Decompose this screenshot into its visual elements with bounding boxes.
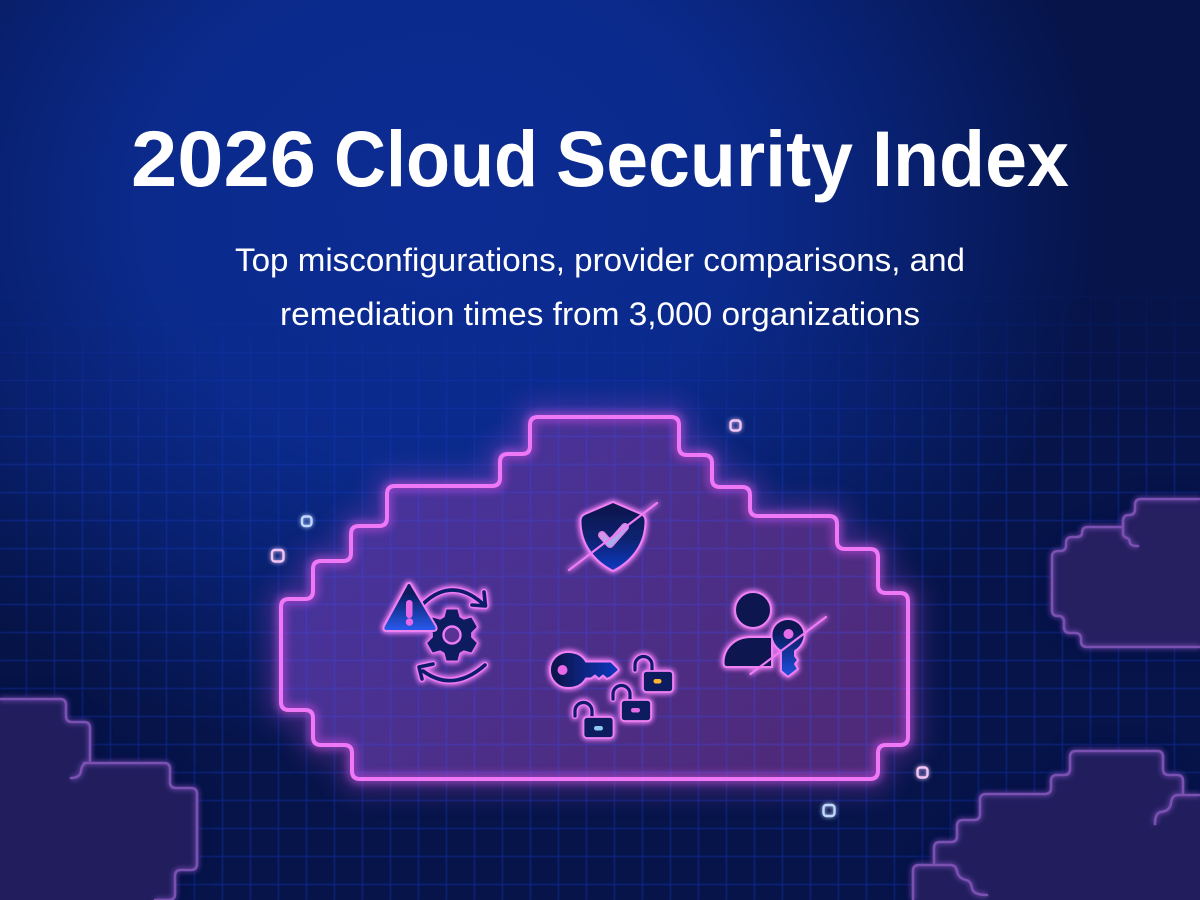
icon: warning triangle xyxy=(383,583,437,631)
icon: warning triangle, gear and rotation arrows xyxy=(383,583,486,681)
decorative pixel: blue left xyxy=(302,516,312,526)
title: 2026 xyxy=(131,114,316,203)
icon: padlock 2 xyxy=(613,686,651,721)
title xyxy=(131,114,1069,203)
main cloud xyxy=(270,410,920,790)
icon: key xyxy=(550,652,619,688)
icon: top rotation arrow xyxy=(424,590,486,606)
background cloud: bottom right xyxy=(913,751,1200,900)
subtitle: remediation times from 3,000 organizations xyxy=(280,296,920,332)
decorative pixel: pink top xyxy=(730,420,740,430)
title: Index xyxy=(872,114,1069,203)
subtitle xyxy=(235,242,965,332)
title: Cloud xyxy=(334,114,538,203)
icon: padlock 1 xyxy=(635,657,673,692)
icon: padlock 3 xyxy=(575,702,614,738)
title: Security xyxy=(556,114,853,203)
icon: user with key, struck through xyxy=(724,592,826,676)
decorative pixel: pink left xyxy=(272,550,284,562)
icon: gear xyxy=(426,609,478,661)
icon: key and open padlocks xyxy=(550,652,673,738)
icon: bottom rotation arrow xyxy=(419,664,485,681)
decorative pixel: blue bottom xyxy=(824,805,834,816)
icon: shield with check, struck through xyxy=(569,502,657,571)
background cloud: bottom left xyxy=(0,699,197,900)
subtitle: Top misconfigurations, provider comparisons, and xyxy=(235,242,965,278)
decorative pixel: pink right xyxy=(918,768,928,778)
background cloud: upper right xyxy=(1052,499,1200,647)
